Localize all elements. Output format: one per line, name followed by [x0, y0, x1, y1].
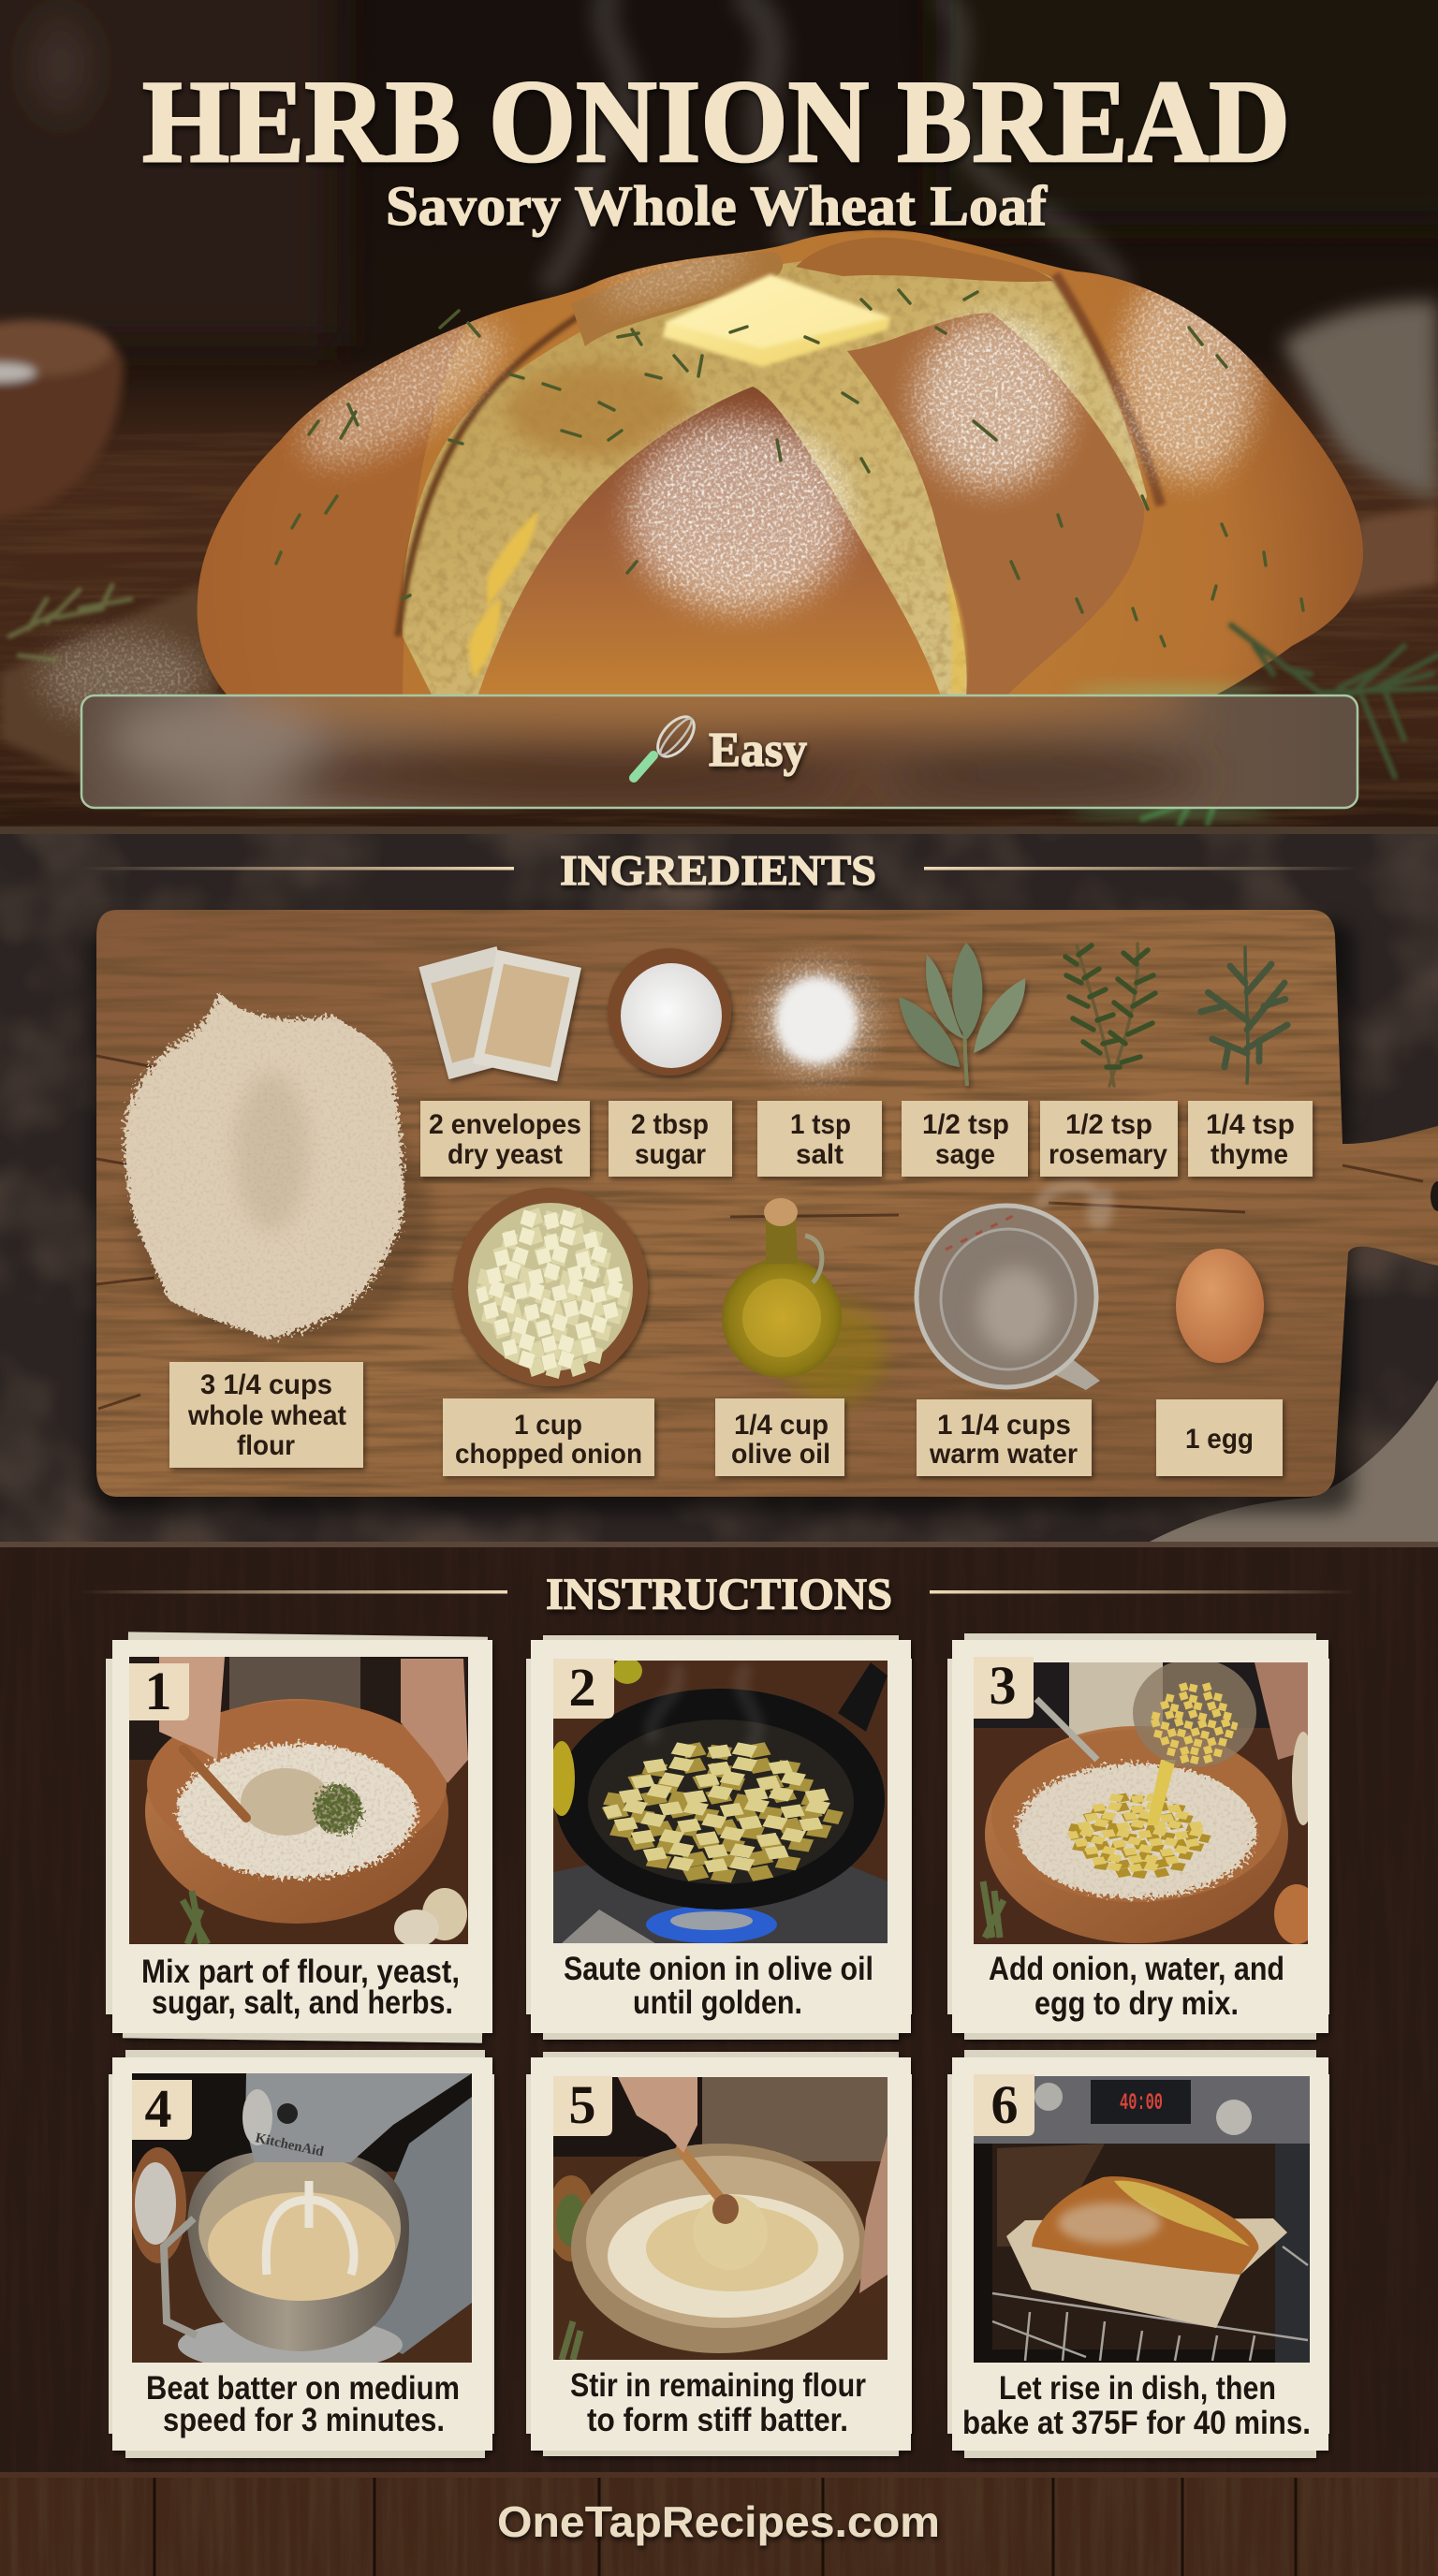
dry yeast envelopes — [418, 946, 581, 1081]
paper stack — [109, 2050, 494, 2458]
ingredient label: flour — [169, 1362, 363, 1468]
step badge 6 — [974, 2074, 1034, 2136]
ingredient label: flour: 3 1/4 cups — [200, 1369, 332, 1400]
ingredients background — [0, 828, 1438, 1545]
step badge 2 — [553, 1657, 614, 1719]
water steam — [1042, 1186, 1107, 1222]
ingredient label: olive oil: olive oil — [731, 1439, 830, 1470]
flour dust — [42, 637, 201, 721]
butter pat — [663, 274, 890, 367]
bread loaf — [198, 230, 1363, 711]
step text 4: Beat batter on medium — [146, 2370, 460, 2407]
ingredient label: dry yeast: 2 envelopes — [429, 1109, 581, 1140]
rosemary sprigs — [1065, 944, 1155, 1086]
step badge 5: 5 — [569, 2074, 595, 2135]
board shadow — [94, 922, 1353, 1512]
olive oil bottle — [722, 1198, 842, 1378]
ingredient label: sugar: 2 tbsp — [631, 1109, 709, 1140]
ingredient label: thyme: thyme — [1211, 1139, 1288, 1170]
heading rule left — [82, 867, 514, 871]
ingredient label: salt: 1 tsp — [790, 1109, 851, 1140]
ingredient label: salt: salt — [796, 1139, 844, 1170]
flour pile — [125, 992, 431, 1348]
salt pile — [762, 967, 871, 1072]
ingredient label: flour: whole wheat — [187, 1400, 346, 1431]
handle hole — [1431, 1181, 1438, 1211]
website: OneTapRecipes.com — [497, 2497, 940, 2546]
step text 5: to form stiff batter. — [587, 2402, 848, 2438]
step badge 4: 4 — [144, 2078, 172, 2139]
ingredient label: sugar — [609, 1101, 732, 1177]
board grain — [96, 910, 1438, 1497]
hero background — [0, 0, 1438, 828]
step text 1: sugar, salt, and herbs. — [152, 1984, 453, 2021]
egg — [1175, 1249, 1269, 1367]
bowl of salt — [0, 319, 124, 520]
step 6 photo: loaf in oven: 40:00 — [1120, 2089, 1163, 2116]
step text 2 — [564, 1951, 873, 2021]
ingredient label: sage — [902, 1101, 1028, 1177]
step card 6 — [947, 2050, 1329, 2458]
ingredient label: onion: 1 cup — [514, 1410, 582, 1441]
background mottling — [0, 828, 1438, 1545]
linen towel — [1283, 301, 1438, 501]
cutting board under loaf — [0, 505, 1438, 777]
flour dusting — [286, 238, 1255, 608]
step text 5: Stir in remaining flour — [570, 2367, 866, 2404]
herb flecks — [276, 290, 1303, 646]
step badge 5 — [553, 2074, 612, 2136]
ingredient label: onion: chopped onion — [455, 1439, 642, 1470]
loaf crust — [198, 230, 1363, 711]
centre crust wedge — [473, 387, 946, 711]
board cracks — [96, 1056, 1423, 1409]
step text 5 — [570, 2367, 866, 2438]
rosemary sprig right — [1142, 625, 1438, 824]
section divider — [0, 827, 1438, 834]
step 3 photo: pouring onions into flour — [974, 1662, 1308, 1944]
ingredient label: egg: 1 egg — [1185, 1424, 1254, 1455]
instructions heading: INSTRUCTIONS — [546, 1570, 892, 1619]
panel border — [81, 695, 1357, 808]
plank seams — [154, 2478, 1296, 2576]
ingredient label: sage: sage — [935, 1139, 995, 1170]
paper stack — [526, 2052, 912, 2456]
panel glow — [1067, 689, 1273, 814]
step 4 photo: stand mixer — [132, 2073, 472, 2363]
ingredients heading: INGREDIENTS — [560, 846, 876, 894]
footer grain — [0, 2476, 1438, 2576]
step badge 3 — [974, 1655, 1034, 1719]
difficulty label: Easy — [709, 724, 807, 777]
ingredient label: egg — [1156, 1399, 1283, 1476]
step badge 3: 3 — [989, 1655, 1017, 1716]
instructions background — [0, 1545, 1438, 2476]
measuring cup — [917, 1206, 1100, 1390]
loaf cut edge — [398, 309, 590, 637]
wooden board — [94, 910, 1438, 1512]
right crust lobe — [847, 314, 1144, 711]
step 2 photo: onions in skillet — [553, 1661, 888, 1943]
step card 2 — [526, 1635, 912, 2040]
step card 5 — [526, 2052, 912, 2456]
faint vertical stripes — [0, 1545, 1438, 2476]
back crust lobe — [571, 252, 783, 346]
ingredient label: onion — [443, 1398, 654, 1476]
back crust lobe right — [796, 238, 1053, 282]
step text 3 — [989, 1951, 1284, 2022]
step text 1 — [141, 1954, 460, 2021]
melted butter drips — [468, 510, 966, 693]
ingredient label: rosemary: 1/2 tsp — [1065, 1109, 1152, 1140]
ingredient label: sage: 1/2 tsp — [922, 1109, 1009, 1140]
ingredient label: dry yeast: dry yeast — [448, 1139, 563, 1170]
step text 4 — [146, 2370, 460, 2438]
instructions section — [0, 1542, 1438, 2476]
subtitle: Savory Whole Wheat Loaf — [386, 175, 1048, 237]
ingredient label: dry yeast — [420, 1101, 590, 1177]
step 1 photo: mixing flour in bowl — [129, 1657, 468, 1944]
ingredient label: flour: flour — [237, 1430, 295, 1461]
crumb interior — [402, 253, 1147, 711]
step text 3: Add onion, water, and — [989, 1951, 1284, 1987]
step 5 photo: stirring batter — [553, 2077, 888, 2360]
steam — [552, 0, 1119, 281]
paper stack — [947, 2050, 1329, 2458]
ingredient label: thyme — [1188, 1101, 1313, 1177]
step text 4: speed for 3 minutes. — [163, 2402, 445, 2438]
ingredient label: sugar: sugar — [635, 1139, 706, 1170]
step badge 4 — [132, 2078, 192, 2140]
heading rule right — [930, 1590, 1357, 1593]
heading rule left — [80, 1590, 507, 1593]
ingredient label: warm water: warm water — [929, 1439, 1078, 1470]
ingredients section — [0, 827, 1438, 1545]
step badge 6: 6 — [990, 2074, 1019, 2135]
oil shadow — [782, 1301, 885, 1404]
step text 1: Mix part of flour, yeast, — [141, 1954, 460, 1990]
paper stack — [106, 1632, 492, 2043]
glass bar — [81, 695, 1358, 809]
herb sprig left — [9, 585, 131, 660]
linen towel — [1142, 1380, 1438, 1545]
step text 2: Saute onion in olive oil — [564, 1951, 873, 1987]
sage leaves — [899, 943, 1025, 1086]
far cut edge — [1055, 274, 1161, 505]
step text 3: egg to dry mix. — [1034, 1985, 1239, 2022]
step card 1 — [106, 1632, 492, 2043]
section divider — [0, 1542, 1438, 1547]
ingredient label: warm water: 1 1/4 cups — [937, 1410, 1071, 1441]
step badge 1 — [129, 1661, 189, 1721]
ingredient label: olive oil: 1/4 cup — [734, 1410, 829, 1441]
thyme sprig — [1200, 947, 1287, 1083]
title: HERB ONION BREAD — [142, 57, 1290, 187]
barrel backdrop — [0, 0, 1438, 346]
crumb texture — [402, 253, 1147, 711]
blurred reflection — [106, 696, 1200, 807]
step card 3 — [947, 1633, 1329, 2040]
icon: whisk — [634, 710, 701, 778]
sugar bowl — [608, 948, 731, 1076]
step text 2: until golden. — [633, 1984, 802, 2021]
heading rule right — [924, 867, 1358, 871]
onion bowl — [453, 1188, 648, 1386]
ingredient label: warm water — [917, 1399, 1092, 1476]
step badge 1: 1 — [144, 1661, 172, 1721]
ingredient label: rosemary — [1040, 1101, 1178, 1177]
step text 6: bake at 375F for 40 mins. — [962, 2405, 1311, 2441]
board body — [96, 910, 1438, 1497]
hero section — [0, 0, 1438, 828]
ingredient label: salt — [757, 1101, 882, 1177]
wood table — [0, 356, 1438, 828]
ingredient label: thyme: 1/4 tsp — [1206, 1109, 1295, 1140]
footer — [0, 2472, 1438, 2576]
paper stack — [526, 1635, 912, 2040]
step card 4 — [109, 2050, 494, 2458]
step 6 photo: loaf in oven — [974, 2076, 1310, 2363]
ingredient label: rosemary: rosemary — [1049, 1139, 1167, 1170]
step text 6: Let rise in dish, then — [999, 2370, 1276, 2407]
step text 6 — [962, 2370, 1311, 2441]
left crust shading — [198, 323, 468, 711]
paper stack — [947, 1633, 1329, 2040]
ingredient label: olive oil — [715, 1398, 844, 1476]
footer border — [0, 2472, 1438, 2478]
difficulty panel — [81, 664, 1358, 814]
toasted crumb patch — [506, 365, 693, 459]
step 4 photo: stand mixer: KitchenAid — [254, 2130, 326, 2159]
footer wood planks — [0, 2476, 1438, 2576]
step badge 2: 2 — [569, 1657, 595, 1718]
